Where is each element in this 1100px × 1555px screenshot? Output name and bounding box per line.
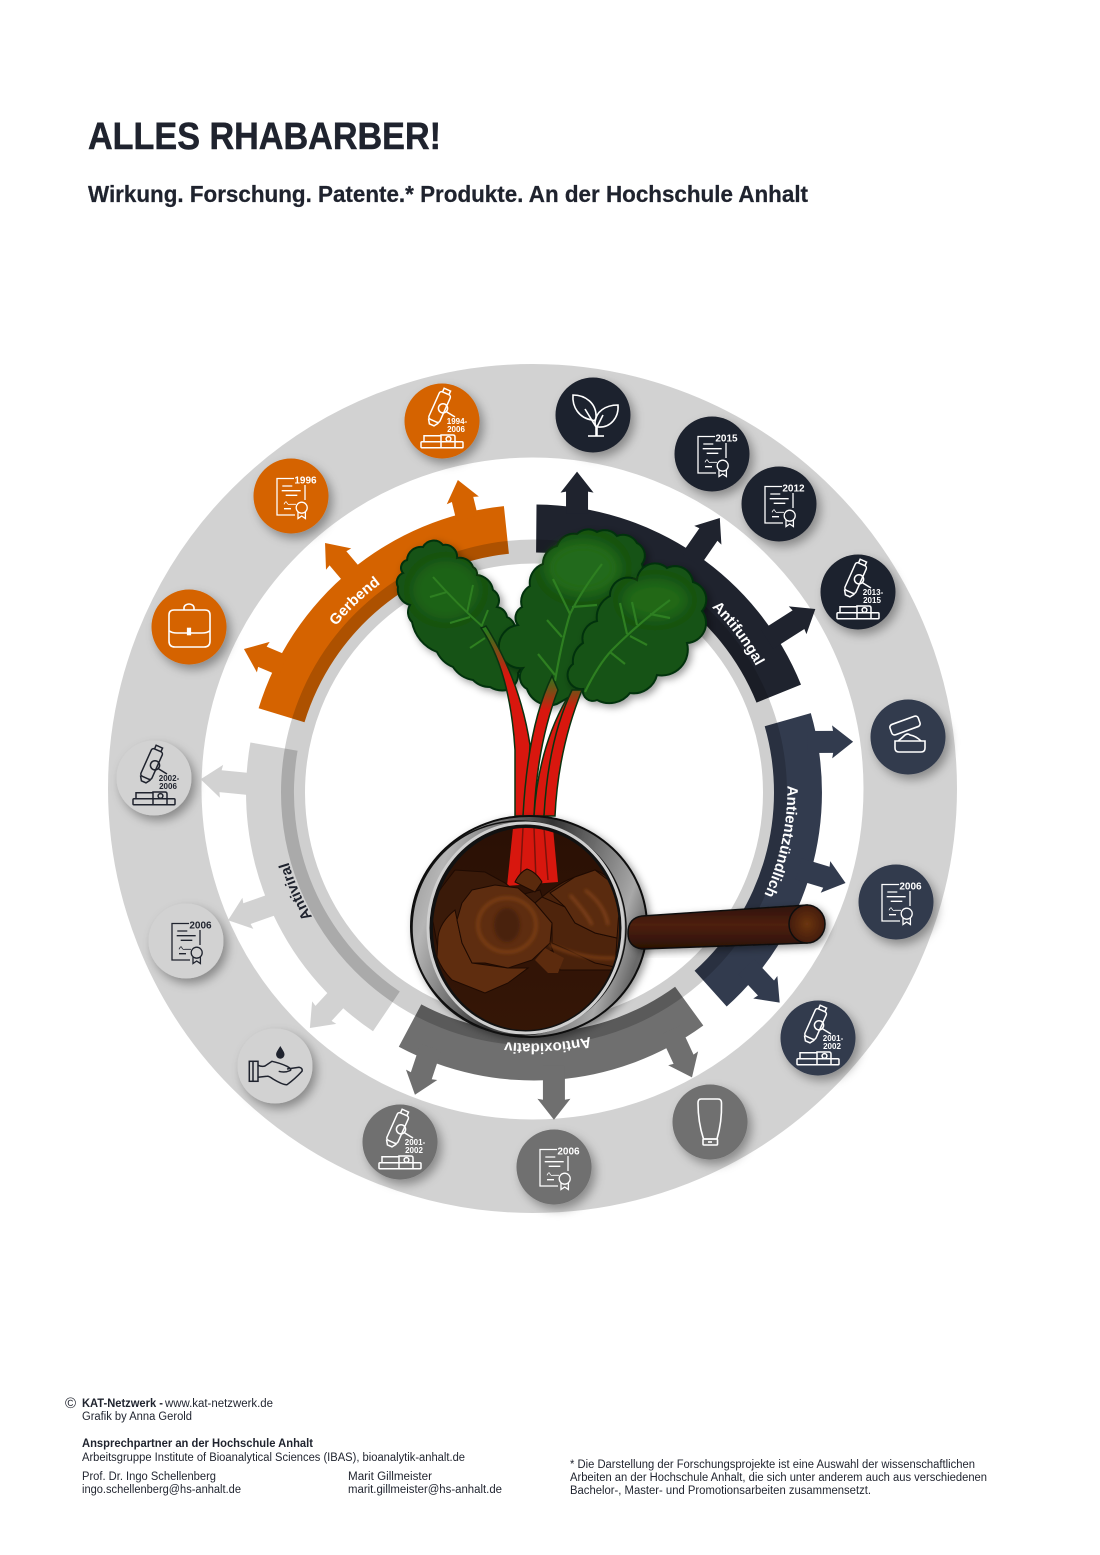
icon: research 2002-2006 antiviral: [116, 740, 192, 816]
footer credits: [65, 1395, 987, 1497]
icon: patent 2006 antioxidative: 2006: [557, 1146, 580, 1158]
icon: patent 2006 antiinflammatory: 2006: [899, 882, 922, 892]
icon: bottle: [672, 1084, 748, 1160]
rhubarb leaf right: [568, 563, 706, 703]
segment: Gerbend: [238, 476, 509, 722]
subtitle: Wirkung. Forschung. Patente.* Produkte. An der Hochschule Anhalt: [88, 181, 808, 207]
segment labels: [278, 538, 808, 1054]
icon: patent 1996: 1996: [294, 476, 317, 486]
icon: patent 2015: 2015: [715, 434, 738, 444]
icon: research 2002-2006 antiviral: 2002-: [159, 774, 180, 783]
icon: research 2001-2002 antiinflammatory: 2001-: [823, 1034, 844, 1043]
icon: patent 2012: 2012: [782, 484, 805, 494]
circular diagram: [108, 364, 957, 1216]
icon: research 2001-2002 antioxidative: 2001-: [405, 1138, 426, 1147]
rhubarb stems: [481, 626, 582, 816]
rhubarb leaf left: [397, 541, 522, 690]
icon: research 2001-2002 antiinflammatory: [780, 1000, 856, 1076]
icon: research 2002-2006 antiviral: 2006: [159, 782, 177, 791]
credit graphic: Grafik by Anna Gerold: [82, 1411, 192, 1423]
icon: research 2013-2015: [820, 554, 896, 630]
footnote: * Die Darstellung der Forschungsprojekte ist eine Auswahl der wissenschaftlichen: [570, 1459, 975, 1471]
icon: patent 2006 antiviral: 2006: [189, 920, 212, 932]
icon: briefcase: [152, 590, 226, 664]
segment: Antioxidativ: [399, 987, 707, 1120]
label: Gerbend: Gerbend: [330, 576, 380, 624]
label: Antiviral: Antiviral: [278, 863, 312, 918]
icon: patent 2012: [742, 466, 816, 542]
segment: Antifungal: [536, 472, 824, 703]
icon: research 1994-2006: 2006: [447, 425, 465, 434]
credit KAT-Netzwerk: [82, 1398, 273, 1410]
soil and root inside glass: [433, 828, 619, 1030]
icon: patent 2015: [674, 416, 750, 492]
icon: research 2013-2015: 2013-: [863, 588, 884, 597]
icon: patent 2006 antiviral: [148, 904, 224, 978]
label: Antientzündlich: Antientzündlich: [764, 786, 798, 896]
icon: patent 1996: [254, 458, 328, 534]
magnifying glass body: [411, 816, 647, 1037]
inner thin ring: [293, 552, 775, 1034]
title: ALLES RHABARBER!: [88, 116, 441, 158]
contact heading: Ansprechpartner an der Hochschule Anhalt: [82, 1438, 313, 1450]
effect segments with arrows: [199, 472, 853, 1120]
icon: research 1994-2006: 1994-: [447, 417, 468, 426]
contact Schellenberg: ingo.schellenberg@hs-anhalt.de: [82, 1484, 241, 1496]
icon: research 2013-2015: 2015: [863, 596, 881, 605]
icon: research 2001-2002 antioxidative: [362, 1104, 438, 1180]
magnifying glass rim: [412, 821, 626, 1035]
icon: patent 2006 antioxidative: [516, 1130, 592, 1204]
outer gray ring: [155, 411, 910, 1166]
magnifying glass handle: [628, 905, 825, 949]
icon: salve jar: [870, 700, 946, 774]
footnote: Bachelor-, Master- und Promotionsarbeiten zusammensetzt.: [570, 1485, 871, 1497]
icon: research 2001-2002 antioxidative: 2002: [405, 1146, 423, 1155]
copyright symbol: ©: [65, 1395, 76, 1412]
contact Gillmeister: marit.gillmeister@hs-anhalt.de: [348, 1484, 502, 1496]
footnote: Arbeiten an der Hochschule Anhalt, die sich unter anderem auch aus verschiedenen: [570, 1472, 987, 1484]
contact group: Arbeitsgruppe Institute of Bioanalytical Sciences (IBAS), bioanalytik-anhalt.de: [82, 1452, 465, 1464]
footnote: [570, 1459, 987, 1497]
icon: patent 2006 antiinflammatory: [858, 864, 934, 940]
rhubarb leaf middle: [499, 529, 645, 705]
credit KAT-Netzwerk: KAT-Netzwerk -: [82, 1398, 163, 1410]
segment: Antiviral: [199, 742, 400, 1039]
icon: hand with drop: [238, 1028, 312, 1104]
illustration: rhubarb plant under magnifying glass: [397, 529, 825, 1037]
icon: research 1994-2006: [404, 384, 480, 458]
credit KAT-Netzwerk: www.kat-netzwerk.de: [164, 1398, 273, 1410]
contact Gillmeister: Marit Gillmeister: [348, 1471, 432, 1483]
contact Gillmeister: [348, 1471, 502, 1496]
contact Schellenberg: Prof. Dr. Ingo Schellenberg: [82, 1471, 216, 1483]
icon: research 2001-2002 antiinflammatory: 2002: [823, 1042, 841, 1051]
contact Schellenberg: [82, 1471, 241, 1496]
segment: Antientzündlich: [695, 713, 853, 1014]
label: Antioxidativ: Antioxidativ: [504, 1037, 590, 1054]
label: Antifungal: Antifungal: [712, 602, 766, 666]
icon: plant: [556, 378, 630, 452]
